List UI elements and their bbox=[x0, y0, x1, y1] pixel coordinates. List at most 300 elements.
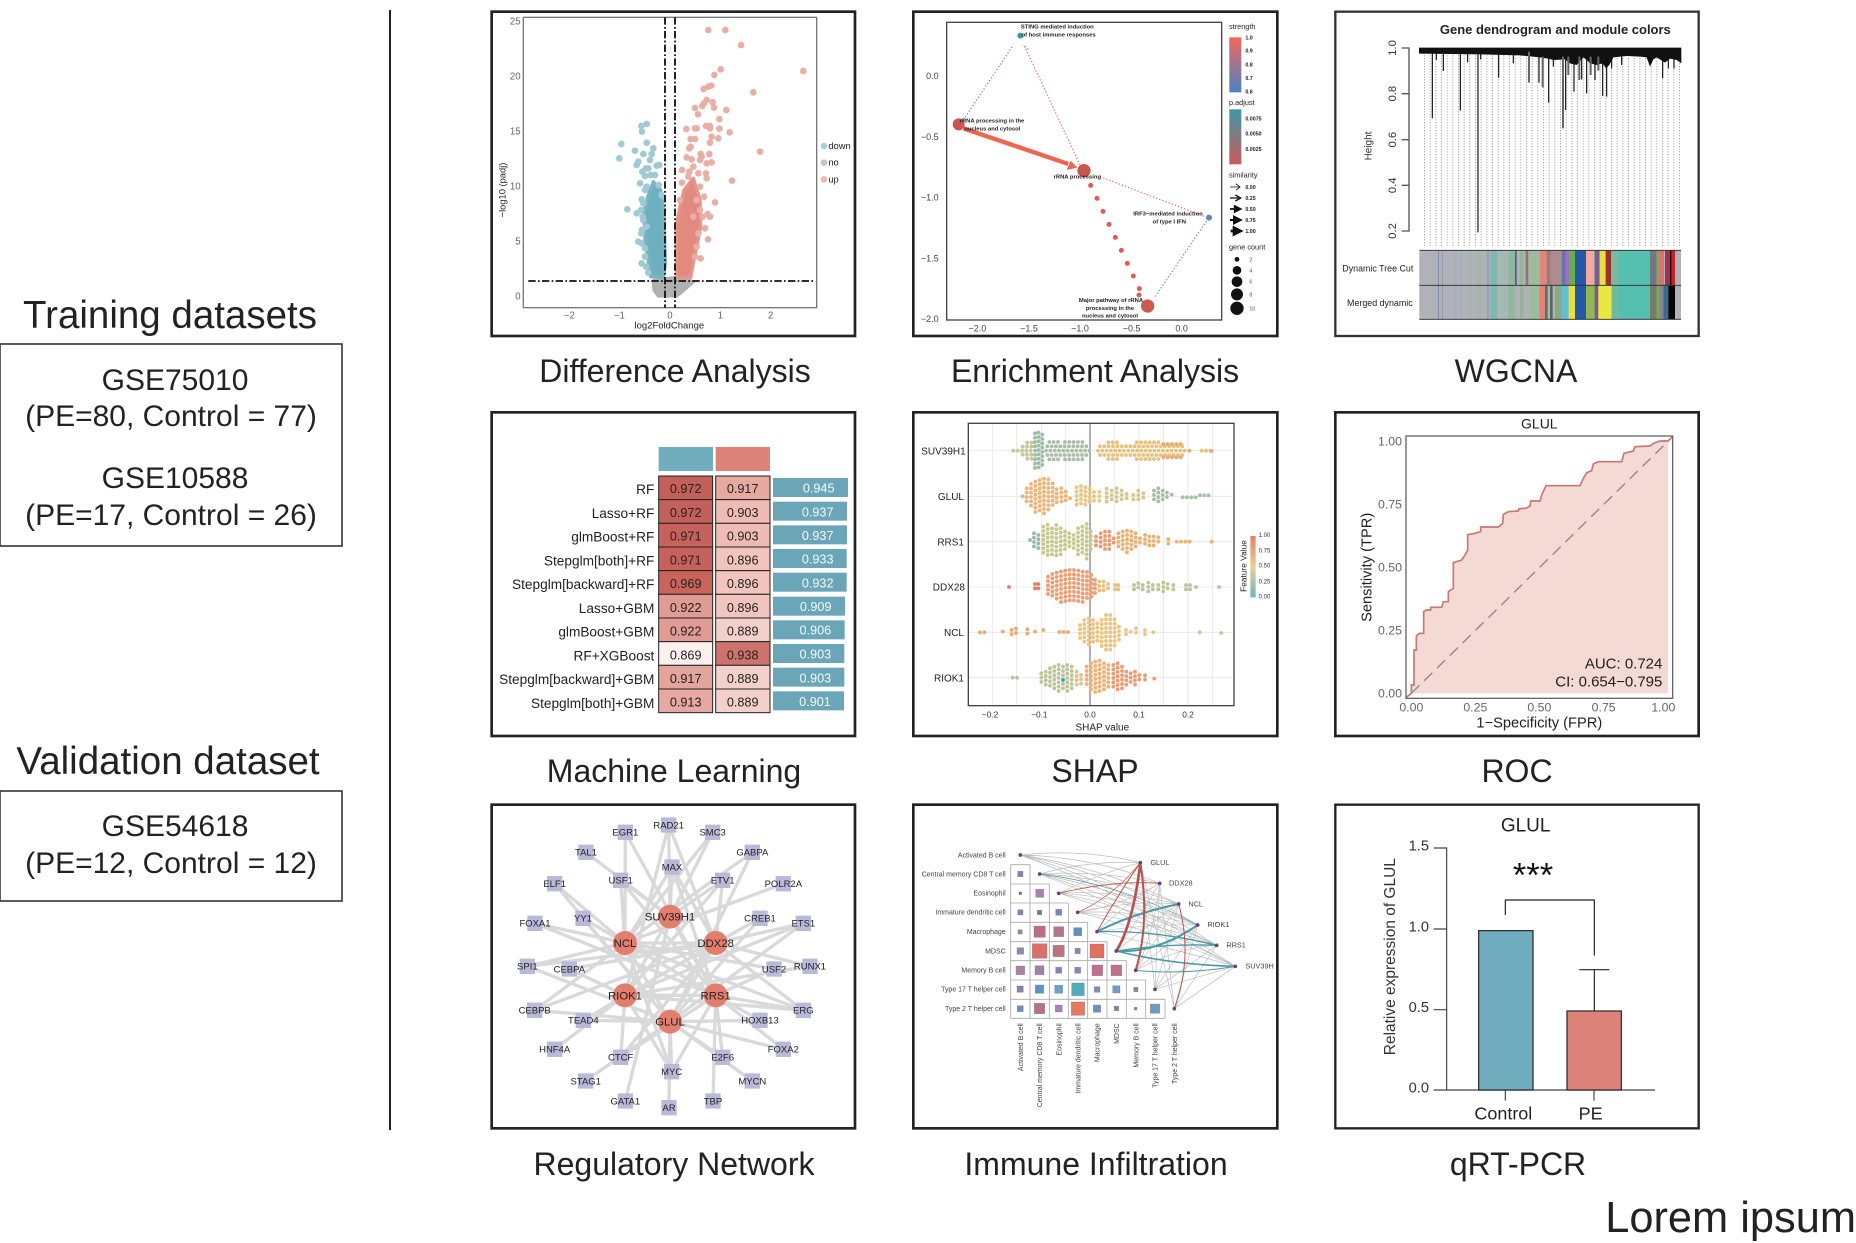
legend: similarity: 1.00 bbox=[1245, 229, 1256, 235]
y axis ticks: 0.00 bbox=[1378, 687, 1402, 701]
panel: immune infiltration bbox=[913, 805, 1277, 1128]
heading: training datasets: Training datasets bbox=[23, 294, 317, 337]
frame bbox=[492, 12, 855, 336]
column header red bbox=[716, 447, 770, 471]
dense up cluster bbox=[676, 178, 701, 277]
gene labels: RRS1 bbox=[937, 537, 964, 548]
legend: feature value: 0.75 bbox=[1259, 548, 1271, 554]
model labels: Stepglm[both]+RF bbox=[544, 553, 654, 568]
transcription factor labels: POLR2A bbox=[765, 879, 803, 890]
dotted thick edge bbox=[1091, 185, 1139, 295]
y axis ticks: 1.0 bbox=[1387, 40, 1399, 56]
heatmap values: 0.969 bbox=[670, 577, 702, 591]
x axis ticks: 0.25 bbox=[1463, 700, 1487, 714]
x axis ticks: 0.75 bbox=[1592, 700, 1616, 714]
y axis ticks: 1.00 bbox=[1378, 435, 1402, 449]
transcription factor labels bbox=[517, 820, 826, 1114]
legend: feature value: 0.25 bbox=[1259, 579, 1271, 585]
x axis ticks: 0.00 bbox=[1399, 700, 1423, 714]
transcription factor labels: STAG1 bbox=[570, 1076, 601, 1087]
node labels: of type I IFN bbox=[1153, 220, 1186, 226]
y axis ticks: 5 bbox=[515, 237, 521, 248]
y axis label: Sensitivity (TPR) bbox=[1359, 513, 1375, 622]
correlation grid bbox=[1011, 865, 1165, 1018]
link nodes bbox=[1020, 855, 1235, 1009]
mean score values: 0.932 bbox=[802, 576, 833, 590]
node labels: nucleus and cytosol bbox=[964, 127, 1021, 133]
transcription factor labels: FOXA2 bbox=[768, 1045, 799, 1056]
significance stars: *** bbox=[1513, 856, 1553, 894]
diagonal reference bbox=[1411, 441, 1668, 693]
row labels bbox=[922, 852, 1006, 1013]
heatmap column 2 bbox=[716, 476, 770, 713]
column labels bbox=[1018, 1023, 1179, 1107]
caption: WGCNA: WGCNA bbox=[1455, 353, 1578, 389]
transcription factor labels: RAD21 bbox=[653, 820, 684, 831]
legend: p.adjust bbox=[1229, 98, 1262, 164]
non-significant points bbox=[653, 277, 693, 296]
y axis ticks: 1.5 bbox=[1409, 839, 1429, 855]
swarm: RRS1 bbox=[1030, 524, 1213, 559]
legend: similarity: 0.00 bbox=[1245, 185, 1256, 191]
node labels: of host immune responses bbox=[1022, 33, 1096, 39]
mean score values: 0.937 bbox=[802, 505, 833, 519]
heatmap values: 0.917 bbox=[727, 482, 758, 496]
hub gene labels bbox=[608, 912, 734, 1029]
plot area bbox=[947, 22, 1222, 320]
transcription factor labels: FOXA1 bbox=[519, 919, 551, 930]
chart title: GLUL bbox=[1521, 415, 1558, 431]
caption: ROC: ROC bbox=[1481, 753, 1553, 789]
AUC annotation: AUC: 0.724 bbox=[1585, 656, 1662, 673]
dynamic tree cut row bbox=[1419, 251, 1681, 285]
x axis ticks: 1.00 bbox=[1651, 700, 1675, 714]
bar: PE bbox=[1567, 1011, 1621, 1090]
row labels: Activated B cell bbox=[958, 852, 1006, 859]
gene labels: GLUL bbox=[1150, 858, 1169, 867]
row labels: Type 2 T helper cell bbox=[945, 1006, 1006, 1013]
dense down cluster bbox=[644, 182, 665, 277]
panel: enrichment network bbox=[913, 12, 1277, 336]
transcription factor labels: YY1 bbox=[574, 914, 592, 925]
hub gene labels: GLUL bbox=[655, 1017, 685, 1029]
heading: validation dataset: Validation dataset bbox=[16, 740, 320, 783]
mean score values: 0.933 bbox=[802, 553, 833, 567]
row labels: Eosinophil bbox=[973, 891, 1006, 898]
y axis ticks: 0.4 bbox=[1387, 177, 1399, 193]
column labels: Central memory CD8 T cell bbox=[1037, 1023, 1044, 1107]
y axis ticks: 0.2 bbox=[1387, 223, 1399, 239]
mean score values: 0.937 bbox=[802, 529, 833, 543]
swarm: NCL bbox=[980, 615, 1222, 651]
column header blue bbox=[659, 447, 713, 471]
mean score bars bbox=[773, 478, 848, 710]
heatmap values: 0.889 bbox=[727, 625, 758, 639]
hub gene labels: SUV39H1 bbox=[645, 912, 695, 924]
row labels: Central memory CD8 T cell bbox=[922, 871, 1006, 878]
transcription factor labels: CEBPB bbox=[519, 1006, 551, 1017]
heatmap values: 0.889 bbox=[727, 696, 758, 710]
legend: gene count: 2 bbox=[1249, 257, 1252, 263]
frame bbox=[913, 805, 1277, 1128]
text: GSE10588 counts: (PE=17, Control = 26) bbox=[25, 499, 317, 532]
column labels: Immature dendritic cell bbox=[1075, 1023, 1082, 1094]
transcription factor labels: RUNX1 bbox=[794, 962, 826, 973]
frame bbox=[913, 12, 1277, 336]
row labels: MDSC bbox=[985, 948, 1006, 955]
y axis label: Relative expression of GLUL bbox=[1382, 858, 1399, 1055]
transcription factor labels: ETV1 bbox=[711, 876, 735, 887]
dotted edges bbox=[963, 45, 1208, 297]
legend: strength: strength bbox=[1229, 22, 1255, 31]
model labels: RF bbox=[636, 482, 654, 497]
category labels: PE bbox=[1579, 1103, 1603, 1123]
node labels: STING mediated induction bbox=[1021, 25, 1094, 31]
frame bbox=[913, 412, 1277, 736]
y axis ticks: 10 bbox=[510, 182, 521, 193]
column labels: Activated B cell bbox=[1018, 1023, 1025, 1071]
heatmap values: 0.922 bbox=[670, 625, 702, 639]
node labels: IRF3−mediated induction bbox=[1133, 212, 1203, 218]
column labels: Macrophage bbox=[1095, 1023, 1102, 1062]
caption: machine learning: Machine Learning bbox=[547, 753, 801, 789]
transcription factor labels: CEBPA bbox=[554, 964, 586, 975]
node labels: Major pathway of rRNA bbox=[1079, 298, 1144, 304]
swarm: RIOK1 bbox=[1013, 661, 1156, 693]
x axis ticks: −0.1 bbox=[1031, 709, 1048, 719]
legend: no bbox=[828, 158, 839, 168]
gene labels bbox=[1150, 858, 1274, 971]
text: GSE10588: GSE10588 bbox=[102, 462, 248, 495]
transcription factor labels: HNF4A bbox=[539, 1045, 571, 1056]
panel: WGCNA dendrogram bbox=[1335, 12, 1699, 336]
scattered down points bbox=[619, 124, 662, 273]
column labels: Type 2 T helper cell bbox=[1172, 1023, 1179, 1084]
chart title: Gene dendrogram and module colors bbox=[1440, 22, 1671, 37]
gene labels: RRS1 bbox=[1226, 941, 1246, 950]
y axis ticks: 0.25 bbox=[1378, 623, 1402, 637]
x axis ticks: −0.2 bbox=[982, 709, 999, 719]
x axis ticks: 0.0 bbox=[1084, 709, 1096, 719]
legend: feature value: Feature Value bbox=[1239, 540, 1249, 592]
legend: p.adjust: 0.0025 bbox=[1245, 147, 1262, 153]
mean score values bbox=[799, 481, 834, 709]
area under curve bbox=[1411, 441, 1668, 693]
heatmap values: 0.903 bbox=[727, 506, 758, 520]
model labels: Stepglm[both]+GBM bbox=[531, 696, 654, 711]
y axis bbox=[1402, 48, 1409, 231]
dendrogram grey branches bbox=[1529, 52, 1598, 128]
legend: strength bbox=[1229, 22, 1255, 96]
bar: control bbox=[1479, 931, 1533, 1090]
x axis ticks: 1 bbox=[718, 310, 723, 321]
transcription factor labels: TEAD4 bbox=[568, 1016, 599, 1027]
sidebar divider bbox=[389, 10, 391, 1130]
column labels: MDSC bbox=[1114, 1023, 1121, 1044]
module colour rows bbox=[1419, 250, 1681, 319]
scattered up points bbox=[680, 30, 803, 258]
legend: up bbox=[828, 174, 839, 184]
y axis ticks: 0.0 bbox=[1409, 1081, 1429, 1097]
legend: gene count: 4 bbox=[1249, 268, 1252, 274]
threshold lines bbox=[528, 17, 815, 308]
row labels: Macrophage bbox=[967, 929, 1006, 936]
model labels: glmBoost+GBM bbox=[558, 625, 654, 640]
error bar bbox=[1579, 970, 1609, 1011]
heatmap values: 0.896 bbox=[727, 601, 758, 615]
transcription factor labels: MYCN bbox=[738, 1076, 766, 1087]
y axis ticks: −1.5 bbox=[921, 254, 939, 264]
dendrogram branches bbox=[1432, 52, 1674, 232]
legend: similarity: 0.50 bbox=[1245, 207, 1256, 213]
caption: immune infiltration: Immune Infiltration bbox=[964, 1146, 1228, 1182]
gene labels: DDX28 bbox=[933, 583, 965, 594]
caption: difference analysis: Difference Analysis bbox=[539, 353, 811, 389]
gene labels: DDX28 bbox=[1169, 879, 1193, 888]
plot border bbox=[968, 423, 1234, 706]
significance bracket bbox=[1505, 900, 1594, 956]
thick arrow bbox=[963, 128, 1068, 164]
zero line bbox=[1088, 424, 1092, 705]
legend: strength: 0.9 bbox=[1245, 49, 1253, 55]
caption: qRT-PCR: qRT-PCR bbox=[1450, 1146, 1586, 1182]
heatmap values: 0.938 bbox=[727, 648, 758, 662]
legend: strength: 1.0 bbox=[1245, 35, 1253, 41]
x axis ticks: 0.2 bbox=[1182, 709, 1194, 719]
dotted red edges bbox=[1023, 45, 1205, 217]
legend: gene count: 6 bbox=[1249, 280, 1252, 286]
training datasets box bbox=[0, 344, 342, 546]
transcription factor labels: ETS1 bbox=[791, 919, 815, 930]
transcription factor labels: MAX bbox=[662, 862, 683, 873]
arrow head bbox=[1067, 161, 1077, 170]
dendrogram top band bbox=[1419, 48, 1681, 68]
colour row rules bbox=[1419, 250, 1681, 319]
heatmap values: 0.903 bbox=[727, 530, 758, 544]
x axis ticks: −1.0 bbox=[1071, 324, 1089, 334]
legend: p.adjust: p.adjust bbox=[1229, 98, 1255, 107]
y axis label: Height bbox=[1363, 131, 1374, 160]
y axis ticks: 20 bbox=[510, 72, 521, 83]
legend: gene count bbox=[1229, 243, 1265, 315]
legend: feature value: 0.50 bbox=[1259, 564, 1271, 570]
transcription factor labels: TAL1 bbox=[575, 848, 597, 859]
node labels: rRNA processing bbox=[1054, 174, 1101, 180]
heatmap values: 0.913 bbox=[670, 696, 702, 710]
column labels: Memory B cell bbox=[1133, 1023, 1140, 1068]
x axis ticks bbox=[982, 709, 1194, 719]
transcription factor labels: CTCF bbox=[608, 1053, 634, 1064]
panel: training datasets bbox=[0, 294, 342, 546]
y axis ticks: 0.50 bbox=[1378, 561, 1402, 575]
up-regulated points bbox=[676, 30, 803, 277]
y axis ticks: 0.75 bbox=[1378, 498, 1402, 512]
legend: gene count: 8 bbox=[1249, 292, 1252, 298]
merged dynamic row bbox=[1419, 286, 1681, 319]
legend: similarity bbox=[1229, 171, 1258, 235]
red link curves bbox=[1059, 863, 1185, 1009]
y axis ticks: 0.6 bbox=[1387, 132, 1399, 148]
legend bbox=[821, 141, 851, 184]
frame bbox=[1335, 412, 1699, 736]
transcription factor labels: EGR1 bbox=[612, 828, 638, 839]
y axis ticks: 25 bbox=[510, 17, 521, 28]
category labels: Control bbox=[1474, 1103, 1532, 1123]
transcription factor labels: SPI1 bbox=[517, 962, 538, 973]
text: GSE54618: GSE54618 bbox=[102, 810, 248, 843]
gene labels: RIOK1 bbox=[934, 673, 964, 684]
legend: gene count: gene count bbox=[1229, 243, 1265, 252]
row label: dynamic tree cut: Dynamic Tree Cut bbox=[1342, 264, 1414, 274]
y axis ticks: 0 bbox=[515, 292, 521, 303]
validation dataset box bbox=[0, 791, 342, 901]
y axis ticks: −0.5 bbox=[921, 132, 939, 142]
model labels: Stepglm[backward]+GBM bbox=[499, 672, 654, 687]
heatmap values bbox=[670, 482, 758, 710]
node labels: rRNA processing in the bbox=[960, 119, 1025, 125]
x axis ticks: 0 bbox=[667, 310, 673, 321]
caption: regulatory network: Regulatory Network bbox=[534, 1146, 816, 1182]
legend: feature value bbox=[1239, 533, 1271, 600]
y axis ticks: −1.0 bbox=[921, 193, 939, 203]
gene labels: SUV39H1 bbox=[921, 446, 966, 457]
network edges bbox=[527, 825, 810, 1108]
row label: merged dynamic: Merged dynamic bbox=[1347, 298, 1413, 308]
gene labels: GLUL bbox=[938, 492, 964, 503]
mean score values: 0.903 bbox=[799, 671, 831, 685]
heatmap values: 0.917 bbox=[670, 672, 702, 686]
axes bbox=[1434, 848, 1655, 1101]
heatmap values: 0.971 bbox=[670, 553, 702, 567]
x axis ticks bbox=[968, 324, 1188, 334]
x axis ticks bbox=[564, 310, 773, 321]
transcription factor labels: GABPA bbox=[736, 848, 769, 859]
legend: feature value: 0.00 bbox=[1259, 594, 1271, 600]
mean score values: 0.901 bbox=[799, 695, 831, 709]
mean score values: 0.909 bbox=[800, 600, 831, 614]
y axis ticks bbox=[1387, 40, 1399, 239]
text: GSE75010: GSE75010 bbox=[102, 364, 248, 397]
grey link curves bbox=[1020, 853, 1235, 1009]
y axis ticks bbox=[1378, 435, 1402, 701]
footer text: Lorem ipsum bbox=[1605, 1194, 1856, 1242]
dotted guide lines bbox=[1424, 50, 1681, 247]
frame bbox=[492, 805, 855, 1128]
caption: SHAP: SHAP bbox=[1051, 753, 1139, 789]
heatmap values: 0.889 bbox=[727, 672, 758, 686]
legend: strength: 0.8 bbox=[1245, 63, 1253, 69]
ROC curve bbox=[1406, 437, 1673, 698]
column labels: Eosinophil bbox=[1056, 1023, 1063, 1056]
y axis label: −log10 (padj) bbox=[497, 163, 507, 217]
y axis ticks: 0.0 bbox=[926, 71, 939, 81]
chart title: GLUL bbox=[1501, 815, 1550, 836]
model labels: Lasso+GBM bbox=[579, 601, 654, 616]
frame bbox=[1335, 12, 1699, 336]
model labels: glmBoost+RF bbox=[571, 530, 654, 545]
transcription factor labels: USF2 bbox=[762, 964, 786, 975]
legend: similarity: similarity bbox=[1229, 171, 1258, 180]
node labels: processing in the bbox=[1086, 306, 1135, 312]
panel: SHAP beeswarm bbox=[913, 412, 1277, 736]
panel: regulatory network bbox=[492, 805, 855, 1128]
heatmap values: 0.896 bbox=[727, 553, 758, 567]
heatmap values: 0.972 bbox=[670, 506, 702, 520]
teal link curves bbox=[1040, 874, 1235, 972]
correlation squares bbox=[1016, 871, 1160, 1015]
y axis ticks bbox=[510, 17, 521, 303]
swarm: GLUL bbox=[1023, 479, 1211, 514]
row labels: Type 17 T helper cell bbox=[941, 987, 1006, 994]
legend: down bbox=[828, 141, 851, 151]
plot border bbox=[1406, 436, 1673, 698]
mean score values: 0.945 bbox=[803, 481, 834, 495]
transcription factor labels: AR bbox=[662, 1103, 676, 1114]
gene labels: RIOK1 bbox=[1207, 920, 1229, 929]
text: GSE75010 counts: (PE=80, Control = 77) bbox=[25, 400, 317, 433]
row labels: Immature dendritic cell bbox=[935, 910, 1006, 917]
panel: ROC curve bbox=[1335, 412, 1699, 736]
panel: volcano plot bbox=[492, 12, 855, 336]
caption: enrichment analysis: Enrichment Analysis bbox=[951, 353, 1239, 389]
panel: machine learning heatmap bbox=[492, 412, 855, 736]
x axis label: log2FoldChange bbox=[635, 320, 704, 331]
frame bbox=[492, 412, 855, 736]
transcription factor labels: GATA1 bbox=[610, 1096, 640, 1107]
panel: validation dataset bbox=[0, 740, 342, 901]
transcription factor labels: TBP bbox=[704, 1096, 722, 1107]
y axis ticks: 1.0 bbox=[1409, 919, 1429, 935]
x axis ticks: 0.50 bbox=[1527, 700, 1551, 714]
hub gene nodes bbox=[613, 905, 728, 1034]
hub gene labels: RIOK1 bbox=[608, 990, 642, 1002]
node labels: nucleus and cytosol bbox=[1082, 314, 1138, 320]
node labels bbox=[960, 25, 1203, 320]
y axis ticks bbox=[921, 71, 939, 324]
transcription factor labels: ELF1 bbox=[543, 879, 566, 890]
model labels: Lasso+RF bbox=[592, 506, 654, 521]
legend: strength: 0.7 bbox=[1245, 76, 1253, 82]
model labels: RF+XGBoost bbox=[573, 648, 655, 663]
x axis label: SHAP value bbox=[1076, 722, 1130, 733]
x axis ticks: −1.5 bbox=[1020, 324, 1038, 334]
text: GSE54618 counts: (PE=12, Control = 12) bbox=[25, 847, 317, 880]
transcription factor labels: SMC3 bbox=[699, 828, 726, 839]
transcription factor labels: MYC bbox=[661, 1067, 682, 1078]
heatmap values: 0.896 bbox=[727, 577, 758, 591]
panel: qRT-PCR bar chart bbox=[1335, 805, 1699, 1128]
transcription factor labels: HOXB13 bbox=[741, 1016, 779, 1027]
swarm: SUV39H1 bbox=[1013, 433, 1213, 469]
x axis ticks: −2.0 bbox=[968, 324, 986, 334]
pathway nodes bbox=[953, 33, 1212, 313]
row labels: Memory B cell bbox=[961, 968, 1006, 975]
model labels: Stepglm[backward]+RF bbox=[512, 577, 654, 592]
transcription factor labels: ERG bbox=[793, 1006, 814, 1017]
gene labels: NCL bbox=[1188, 899, 1203, 908]
column labels: Type 17 T helper cell bbox=[1153, 1023, 1160, 1088]
x axis ticks: −2 bbox=[564, 310, 575, 321]
heatmap column 1 bbox=[659, 476, 713, 713]
x axis ticks bbox=[1399, 700, 1675, 714]
x axis ticks: −1 bbox=[614, 310, 625, 321]
heatmap values: 0.972 bbox=[670, 482, 702, 496]
model labels bbox=[499, 482, 655, 711]
down-regulated points bbox=[619, 124, 665, 277]
x axis ticks: −0.5 bbox=[1123, 324, 1141, 334]
y axis ticks: 0.8 bbox=[1387, 86, 1399, 102]
AUC annotation: CI: 0.654−0.795 bbox=[1555, 673, 1662, 690]
